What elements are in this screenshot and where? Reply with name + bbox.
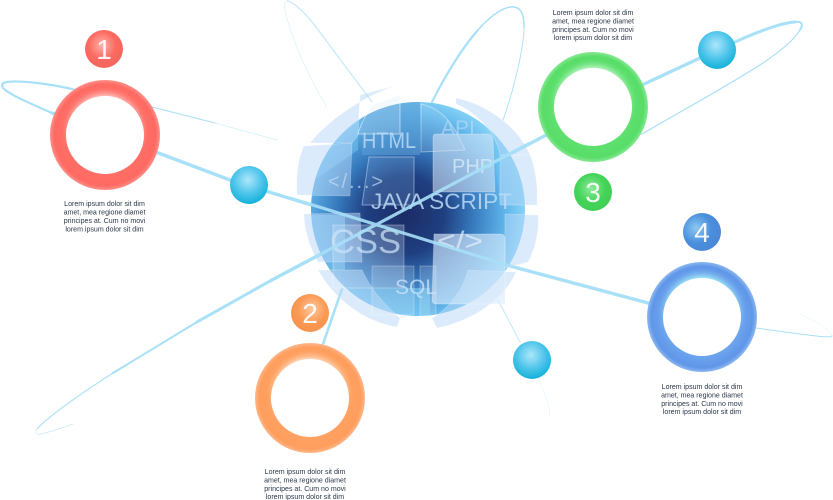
globe <box>285 85 538 328</box>
ring 3 <box>538 52 648 162</box>
text 1: amet, mea regione diamet <box>64 210 145 216</box>
item 2 <box>255 294 365 500</box>
tile: api <box>421 104 465 152</box>
text 3: Lorem ipsum dolor sit dim <box>553 10 633 17</box>
text 1: principes at. Cum no movi <box>64 218 146 225</box>
orbit: top left loop to lower right tail <box>284 1 550 417</box>
lines crossing globe <box>285 143 530 273</box>
item 4 <box>647 213 757 416</box>
tile: php front <box>433 134 495 192</box>
label: closing tag: </> <box>437 226 483 256</box>
globe labels <box>328 117 512 299</box>
orbit: left to right line through globe <box>2 81 832 337</box>
text 4: principes at. Cum no movi <box>661 401 743 408</box>
label: tag dots: </...> <box>328 171 383 193</box>
text 4: amet, mea regione diamet <box>661 392 743 400</box>
label: JAVA SCRIPT: JAVA SCRIPT <box>371 189 512 214</box>
label: CSS: CSS <box>330 223 401 261</box>
ring 2 <box>255 343 365 453</box>
text 3: amet, mea regione diamet <box>552 18 634 26</box>
label: SQL: SQL <box>395 276 437 299</box>
text 4: Lorem ipsum dolor sit dim <box>662 384 742 391</box>
tile: css <box>333 225 404 288</box>
badge 2 <box>291 294 329 332</box>
label: PHP: PHP <box>452 156 493 178</box>
text 1: lorem ipsum dolor sit dim <box>65 226 144 234</box>
shell pieces around globe <box>297 85 538 328</box>
tile: html <box>358 95 400 134</box>
badge 2: 2 <box>302 298 318 329</box>
badge 4: 4 <box>694 217 710 248</box>
text 3: lorem ipsum dolor sit dim <box>554 35 632 42</box>
label: HTML: HTML <box>362 128 416 153</box>
badge 3: 3 <box>585 177 601 208</box>
text 2: Lorem ipsum dolor sit dim <box>265 469 345 476</box>
badge 1: 1 <box>96 34 112 65</box>
text 2: principes at. Cum no movi <box>264 486 346 493</box>
tile: sql <box>372 266 436 316</box>
tile: center <box>362 157 414 205</box>
text 1: Lorem ipsum dolor sit dim <box>64 201 145 208</box>
badge 1 <box>85 30 123 68</box>
badge 3 <box>574 173 612 211</box>
text 3: principes at. Cum no movi <box>552 27 634 34</box>
badge 4 <box>683 213 721 251</box>
ring 1 <box>50 80 160 190</box>
item 1 <box>50 30 160 234</box>
globe shaded quadrants <box>300 100 530 320</box>
text 4: lorem ipsum dolor sit dim <box>663 409 741 416</box>
text 2: amet, mea regione diamet <box>264 478 346 484</box>
sphere: top right <box>698 31 736 69</box>
ring 4 <box>647 262 757 372</box>
item 3 <box>538 10 648 211</box>
sphere: left <box>230 166 268 204</box>
sphere: bottom <box>513 341 551 379</box>
orbit: lower left to upper right line through globe <box>36 22 802 434</box>
tile: tag front <box>432 234 505 304</box>
orbit: ring 2 to top right loop <box>323 7 524 344</box>
label: API: API <box>441 117 475 140</box>
globe sphere <box>311 102 525 316</box>
